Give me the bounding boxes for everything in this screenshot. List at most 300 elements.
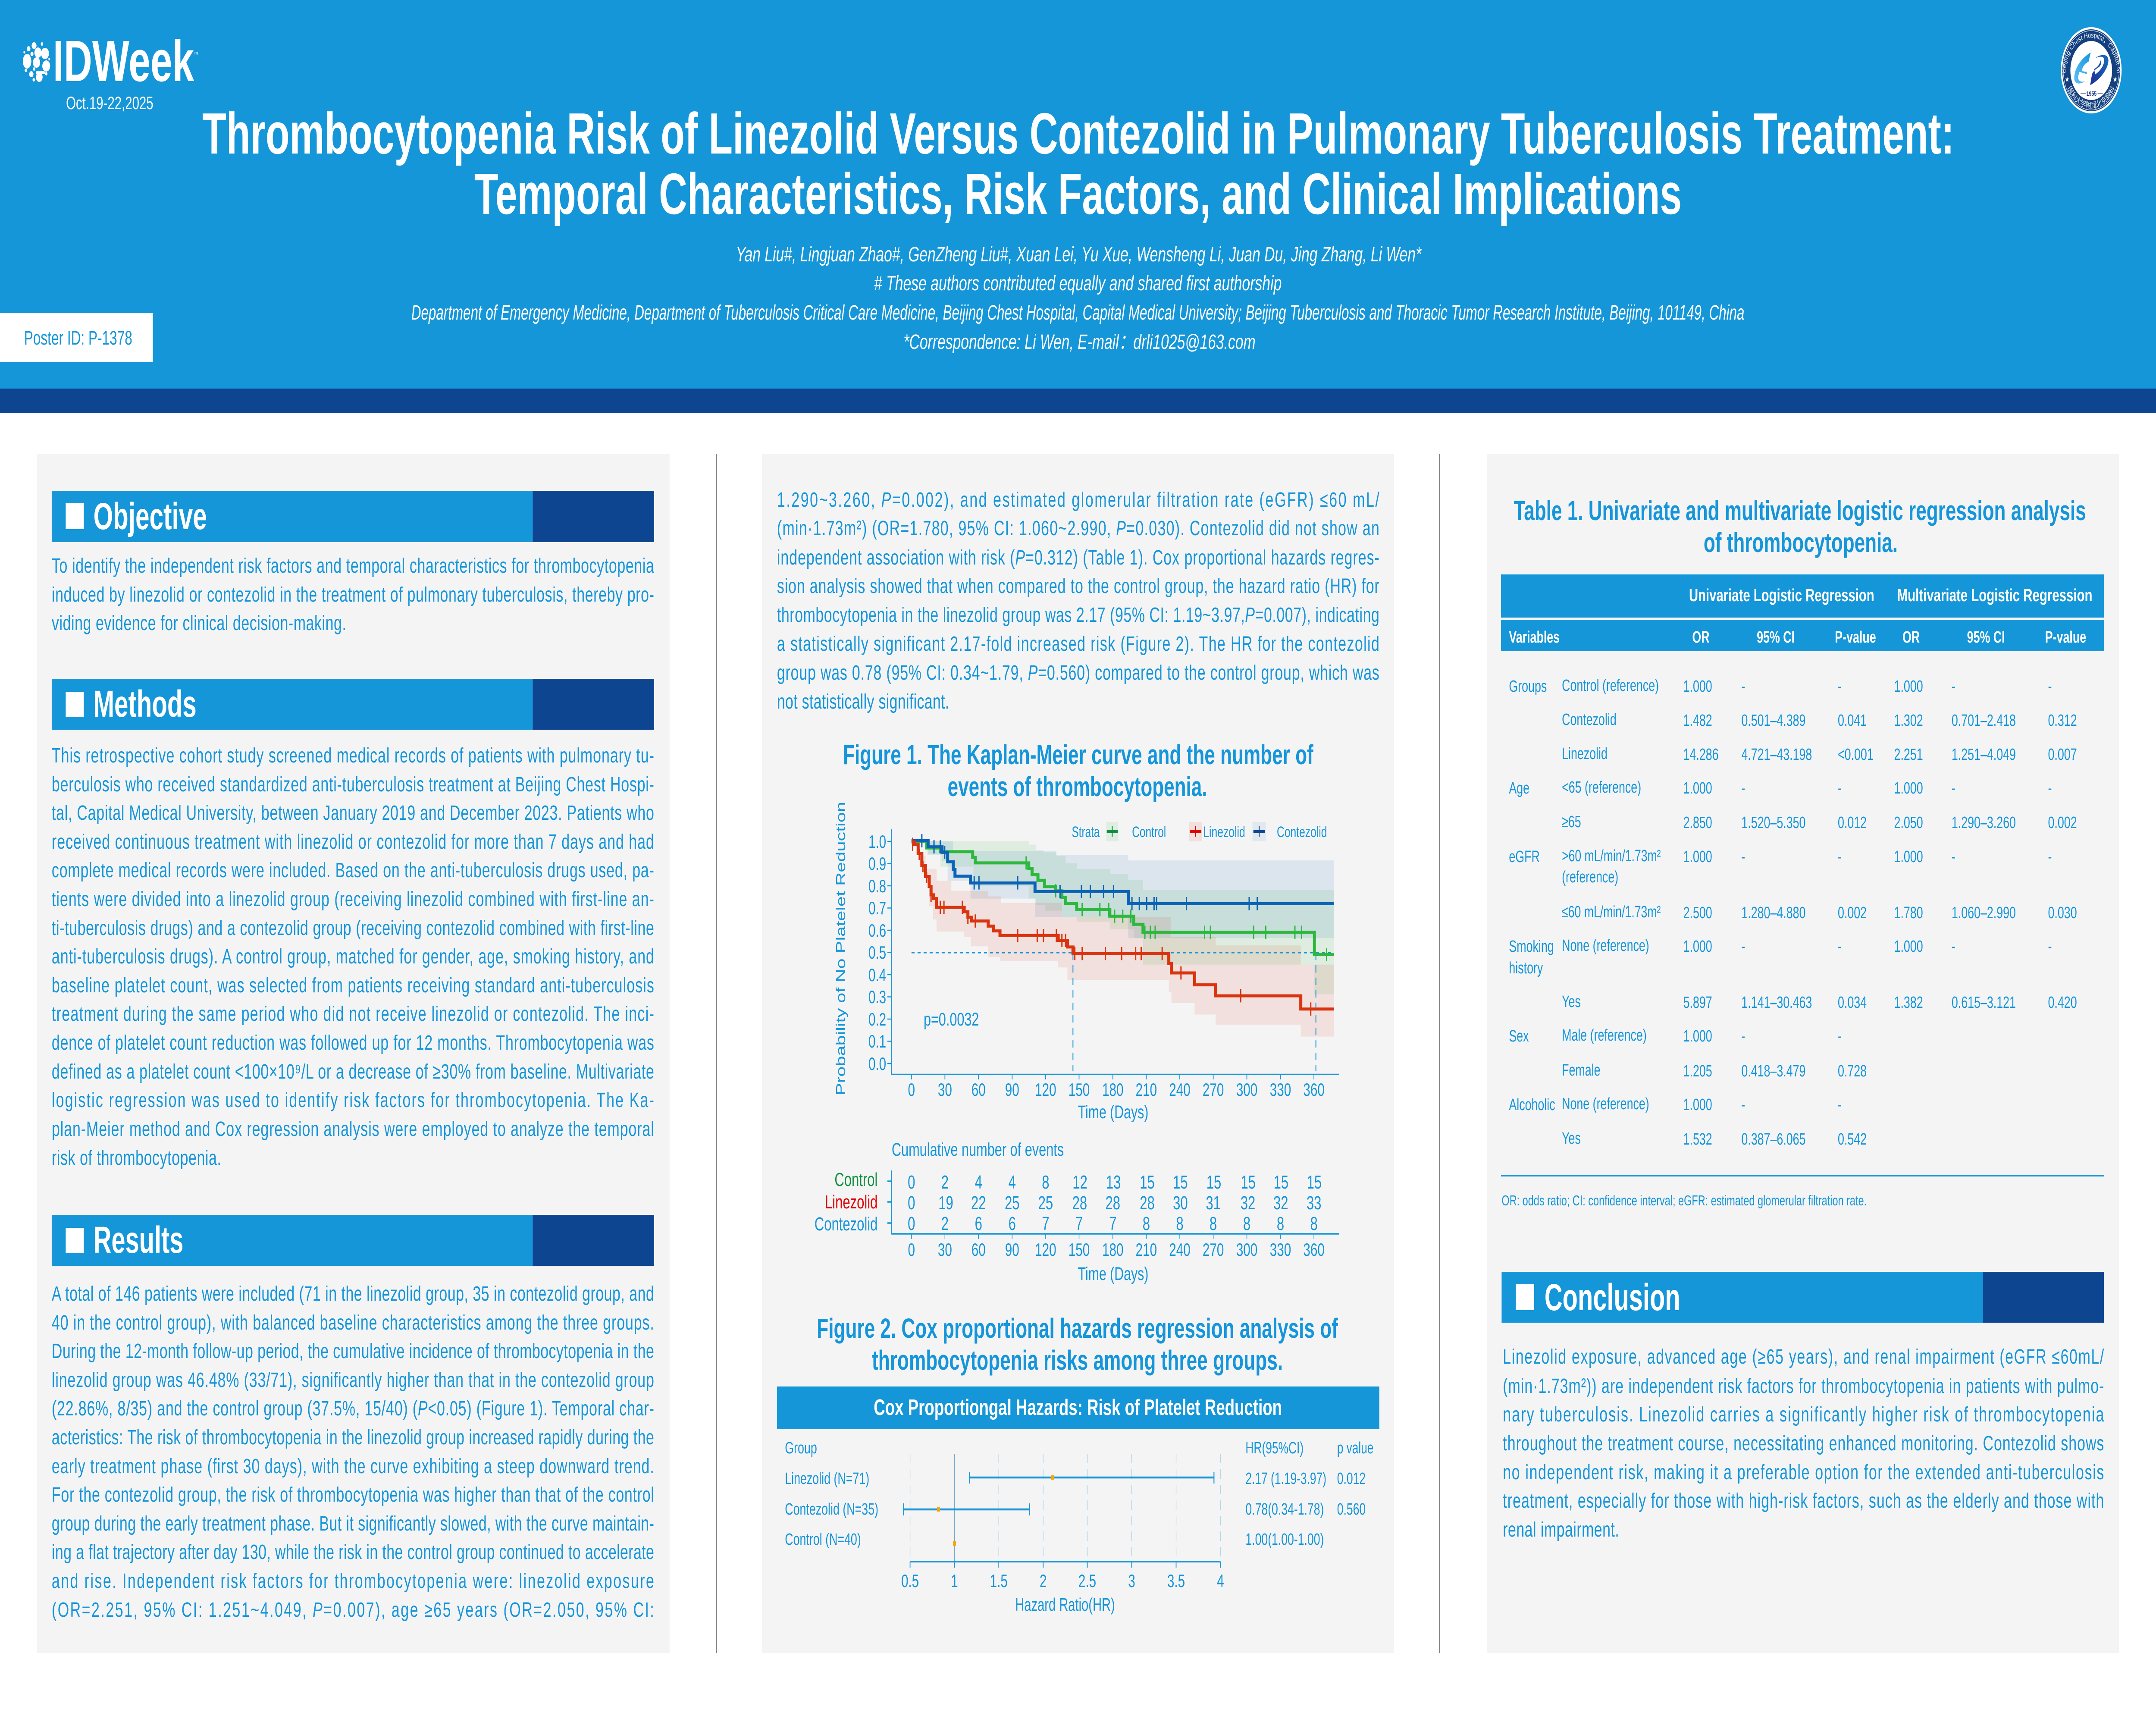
median reference lines [912,953,1334,1071]
row: smoking none: 1.000 [1683,937,1712,955]
forest axis labels: 2 [1040,1571,1047,1591]
header banner [0,0,2156,413]
row: age 65 plus: 0.012 [1838,813,1867,831]
text block: results: group during the early treatment phase. But it significantly slowed, with the curve maintain- [52,1512,654,1535]
forest axis labels: 2.5 [1078,1571,1096,1591]
table: cumulative number of events: 30 [1173,1193,1188,1214]
row: smoking yes: 0.420 [2048,993,2077,1011]
heading: Table 1 [1514,495,2086,558]
row: smoking none: 1.000 [1894,937,1923,955]
table header: OR [1902,627,1920,646]
forest axis labels: 4 [1217,1571,1224,1591]
text block: methods: tal, Capital Medical University, between January 2019 and December 2023. Patients who [52,801,654,824]
text block: results: (22.86%, 8/35) and the control group (37.5%, 15/40) (P<0.05) (Figure 1). Temporal char- [52,1396,654,1420]
table: cumulative number of events: 22 [971,1193,986,1214]
table header: OR [1692,627,1710,646]
row: sex male: Male (reference) [1562,1026,1647,1044]
row: groups control: Groups [1509,677,1547,695]
row: smoking none: - [2048,937,2052,955]
row: smoking none: - [1838,937,1842,955]
row: linezolid [1562,744,2077,763]
row: age 65 plus: ≥65 [1562,812,1581,831]
text block: methods: baseline platelet count, was selected from patients receiving standard anti-tuberculosis [52,973,654,997]
table header: 95% CI [1757,627,1795,646]
row: age reference: - [1838,778,1842,797]
row: alcoholic yes: 1.532 [1683,1129,1712,1148]
table: cumulative number of events: Time (Days) [1078,1263,1148,1284]
forest axis labels: Hazard Ratio(HR) [1015,1594,1115,1615]
text block: results continued: not statistically significant. [777,690,949,713]
text block: conclusion: throughout the treatment course, necessitating enhanced monitoring. Contezolid shows [1503,1431,2104,1455]
text block: methods: ti-tuberculosis drugs) and a contezolid group (receiving contezolid combined with first-line [52,916,654,939]
row: sex female: 0.728 [1838,1061,1867,1080]
table: cumulative number of events: 4 [975,1172,982,1193]
row: eGFR reference [1509,846,2052,886]
chart: Kaplan-Meier curve [833,802,1339,1122]
table: cumulative number of events: 120 [1035,1239,1056,1260]
heading: Figure 1: Figure 1. The Kaplan-Meier curve and the number of [843,739,1313,770]
row: Linezolid: 2.17 (1.19-3.97) [1245,1469,1326,1487]
authors and affiliations: Department of Emergency Medicine, Department of Tuberculosis Critical Care Medicine, Beijing Chest Hospital, Capital Medical University; Beijing Tuberculosis and Thoracic Tumor Research Institute, Beijing, 101149, China [411,301,1744,324]
text block: results continued: thrombocytopenia in the linezolid group was 2.17 (95% CI: 1.19~3.97,P=0.007), indicating [777,603,1379,626]
table: cumulative number of events: 15 [1140,1172,1155,1193]
table: cumulative number of events: 8 [1176,1214,1184,1234]
forest axis labels: 3.5 [1167,1571,1185,1591]
text block: methods: This retrospective cohort study screened medical records of patients with pulmonary tu- [52,743,654,767]
row: eGFR low: ≤60 mL/min/1.73m² [1562,902,1661,921]
text block: results: ing a flat trajectory after day 130, while the risk in the control group continued to accelerate [52,1540,654,1563]
title: Thrombocytopenia Risk of Linezolid Versus Contezolid in Pulmonary Tuberculosis Treatment: [202,101,1954,166]
table header: P-value [1835,627,1876,646]
table: cumulative number of events: 6 [1009,1214,1016,1234]
y axis tick labels: 0.1 [868,1031,886,1051]
row: alcoholic none: None (reference) [1562,1094,1649,1113]
text block: methods [52,743,654,1169]
row: linezolid: Linezolid [1562,744,1608,762]
text block: results continued [777,488,1379,713]
text block: results continued: a statistically significant 2.17-fold increased risk (Figure 2). The HR for the contezolid [777,632,1379,655]
table footnote: OR: odds ratio; CI: confidence interval; eGFR: estimated glomerular filtration rate. [1501,1193,1867,1209]
text block: results continued: sion analysis showed that when compared to the control group, the hazard ratio (HR) for [777,574,1379,597]
heading: Methods [52,679,654,730]
x axis tick labels: 30 [938,1079,952,1100]
poster ID badge: Poster ID: P-1378 [24,328,132,349]
icon: Beijing Chest Hospital seal: ★ [2113,76,2117,83]
heading: Figure 2: thrombocytopenia risks among three groups. [872,1345,1283,1376]
row: alcoholic none: - [1838,1095,1842,1114]
y axis tick labels [868,831,886,1074]
x axis tick labels: 0 [908,1079,915,1100]
row: contezolid: 0.041 [1838,711,1867,729]
table: cumulative number of events [815,1139,1339,1284]
icon: IDWeek molecule logo [23,42,50,82]
row: eGFR reference: - [1741,847,1745,866]
column headers [785,1438,1373,1457]
text block: results: (OR=2.251, 95% CI: 1.251~4.049, P=0.007), age ≥65 years (OR=2.050, 95% CI: [52,1598,654,1621]
row: Contezolid: 0.78(0.34-1.78) [1245,1499,1324,1518]
logo wordmark: IDWeek: IDWeek [53,28,194,94]
row: alcoholic yes: Yes [1562,1129,1581,1147]
text block: methods: dence of platelet count reduction was followed up for 12 months. Thrombocytopenia was [52,1031,654,1054]
table: cumulative number of events: 15 [1241,1172,1256,1193]
text block: methods: received continuous treatment with linezolid or contezolid for more than 7 days and had [52,830,654,853]
row: smoking yes: 0.615–3.121 [1952,993,2016,1011]
table: cumulative number of events: Linezolid [825,1192,877,1213]
table: cumulative number of events: 270 [1203,1239,1224,1260]
text block: methods: risk of thrombocytopenia. [52,1146,221,1169]
y axis tick labels: 0.8 [868,876,886,896]
heading: Figure 2 [817,1313,1338,1376]
table: cumulative number of events: 28 [1072,1193,1087,1214]
text block: results continued: independent association with risk (P=0.312) (Table 1). Cox proportional hazards regres- [777,546,1379,569]
text block: results: and rise. Independent risk factors for thrombocytopenia were: linezolid exposure [52,1569,654,1592]
authors and affiliations [411,242,1744,353]
row: sex male: Sex [1509,1026,1529,1045]
legend: Strata [1072,824,1100,841]
row: alcoholic yes [1562,1129,1867,1148]
table header: Multivariate Logistic Regression [1897,585,2093,605]
text block: methods: defined as a platelet count <100×10⁹/L or a decrease of ≥30% from baseline. Multivariate [52,1060,654,1083]
heading: Table 1: of thrombocytopenia. [1704,527,1898,558]
authors and affiliations: # These authors contributed equally and shared first authorship [874,271,1282,295]
row: eGFR low: 1.780 [1894,903,1923,922]
heading: Table 1: Table 1. Univariate and multivariate logistic regression analysis [1514,495,2086,526]
x axis tick labels: 150 [1069,1079,1090,1100]
y axis tick labels: 1.0 [868,831,886,852]
table: cumulative number of events: 4 [1009,1172,1016,1193]
row: alcoholic none: - [1741,1095,1745,1114]
forest axis labels: 1.5 [990,1571,1008,1591]
column headers: p value [1337,1438,1373,1457]
x axis tick labels: 360 [1303,1079,1325,1100]
row: eGFR reference: eGFR [1509,847,1540,866]
row: sex female: Female [1562,1060,1600,1079]
row: linezolid: 0.007 [2048,745,2077,763]
confidence bands [912,841,1334,1036]
table: cumulative number of events: 60 [971,1239,986,1260]
row: smoking none: - [1952,937,1955,955]
legend: Contezolid [1277,824,1327,841]
table: cumulative number of events: Cumulative number of events [892,1139,1064,1160]
row: age reference: - [2048,778,2052,797]
row: groups control [1509,676,2052,695]
table: cumulative number of events: 7 [1042,1214,1049,1234]
table: cumulative number of events: 25 [1005,1193,1020,1214]
text block: methods: plan-Meier method and Cox regression analysis were employed to analyze the temporal [52,1117,654,1140]
y axis tick labels: 0.6 [868,920,886,941]
panel: middle column [762,454,1394,1653]
x axis tick labels: 300 [1236,1079,1257,1100]
row: contezolid: 0.312 [2048,711,2077,729]
table: cumulative number of events: 90 [1005,1239,1019,1260]
table: cumulative number of events: 0 [908,1172,915,1193]
table: cumulative number of events: 32 [1273,1193,1288,1214]
column headers: HR(95%CI) [1245,1438,1304,1457]
row: eGFR low [1562,902,2077,922]
table header: Variables [1509,627,1560,646]
table: cumulative number of events: 180 [1102,1239,1123,1260]
row: groups control: - [2048,677,2052,695]
table: cumulative number of events: 19 [938,1193,953,1214]
table: cumulative number of events: 0 [908,1214,915,1234]
row: eGFR low: 1.280–4.880 [1741,903,1805,922]
title [202,101,1954,226]
heading: Figure 1: events of thrombocytopenia. [948,771,1207,802]
row: Contezolid: 0.560 [1337,1499,1366,1518]
x axis tick labels: 270 [1203,1079,1224,1100]
row: groups control: - [1741,677,1745,695]
row: groups control: Control (reference) [1562,676,1659,694]
row: smoking none: Smoking [1509,937,1554,955]
table: cumulative number of events: 330 [1270,1239,1291,1260]
row: smoking yes: Yes [1562,992,1581,1010]
row: linezolid: <0.001 [1838,745,1874,763]
text block: methods: logistic regression was used to identify risk factors for thrombocytopenia. The Ka- [52,1088,654,1111]
row: age reference: - [1741,778,1745,797]
text block: results: acteristics: The risk of thrombocytopenia in the linezolid group increased rapidly during the [52,1425,654,1449]
table: cumulative number of events: 7 [1109,1214,1116,1234]
forest axis [910,1561,1221,1562]
y axis tick labels: 0.2 [868,1009,886,1029]
row: age 65 plus: 2.050 [1894,813,1923,831]
row: contezolid: 1.302 [1894,711,1923,729]
heading: Conclusion [1501,1272,2104,1323]
y axis tick labels: 0.7 [868,898,886,918]
curves [912,834,1334,1016]
table: cumulative number of events: 150 [1069,1239,1090,1260]
text block: objective [52,554,655,634]
row: linezolid: 14.286 [1683,745,1719,763]
y axis tick labels: 0.9 [868,853,886,874]
x axis tick labels: 120 [1035,1079,1056,1100]
authors and affiliations: Yan Liu#, Lingjuan Zhao#, GenZheng Liu#, Xuan Lei, Yu Xue, Wensheng Li, Juan Du, Jing Zhang, Li Wen* [736,242,1422,266]
table: cumulative number of events: 15 [1307,1172,1322,1193]
y axis tick labels: 0.4 [868,965,886,985]
heading: Conclusion: Conclusion [1545,1276,1680,1318]
table: cumulative number of events: 30 [938,1239,952,1260]
heading: Objective [52,491,654,542]
table: cumulative number of events: 360 [1303,1239,1325,1260]
text block: methods: complete medical records were included. Based on the anti-tuberculosis drugs used, pa- [52,858,654,881]
row: sex male: - [1838,1026,1842,1045]
heading: Methods: Methods [94,683,197,725]
row: groups control: - [1952,677,1955,695]
row: Linezolid: Linezolid (N=71) [785,1469,869,1487]
row: eGFR low: 1.060–2.990 [1952,903,2016,922]
row: smoking none [1509,936,2052,977]
text block: conclusion: (min·1.73m²)) are independent risk factors for thrombocytopenia in patients with pulmo- [1503,1374,2104,1397]
text block: methods: treatment during the same period who did not receive linezolid or contezolid. The inci- [52,1002,654,1025]
row: alcoholic none: Alcoholic [1509,1095,1555,1114]
text block: conclusion: treatment, especially for those with high-risk factors, such as the elderly and those with [1503,1489,2104,1512]
row: sex female: 1.205 [1683,1061,1712,1080]
row: eGFR reference: >60 mL/min/1.73m² [1562,846,1661,865]
text block: objective: viding evidence for clinical decision-making. [52,611,346,634]
conference date: Oct.19-22,2025 [66,93,154,113]
table: cumulative number of events: 31 [1206,1193,1221,1214]
text block: results: During the 12-month follow-up period, the cumulative incidence of thrombocytopenia in the [52,1339,654,1362]
text block: conclusion: no independent risk, making it a preferable option for the extended anti-tuberculosis [1503,1460,2104,1484]
text block: conclusion [1503,1345,2104,1541]
y axis title: Probability of No Platelet Reduction [833,802,848,1095]
row: sex male: 1.000 [1683,1026,1712,1045]
forest axis labels: 0.5 [901,1571,919,1591]
table: cumulative number of events: 300 [1236,1239,1257,1260]
heading: Figure 2: Figure 2. Cox proportional hazards regression analysis of [817,1313,1338,1344]
table header [1501,574,2104,651]
row: sex female: 0.418–3.479 [1741,1061,1805,1080]
legend: Linezolid [1203,824,1245,841]
heading: Objective: Objective [94,495,207,537]
table: cumulative number of events: 13 [1106,1172,1121,1193]
poster ID badge [0,313,153,362]
row: eGFR reference: (reference) [1562,867,1618,886]
table: cumulative number of events: 8 [1042,1172,1049,1193]
table: cumulative number of events: 7 [1075,1214,1083,1234]
text block: results: 40 in the control group), with balanced baseline characteristics among the three groups. [52,1311,654,1334]
row: eGFR reference: 1.000 [1894,847,1923,866]
text block: conclusion: Linezolid exposure, advanced age (≥65 years), and renal impairment (eGFR ≤60mL/ [1503,1345,2104,1368]
x axis tick labels: 60 [971,1079,986,1100]
y axis tick labels: 0.0 [868,1054,886,1074]
row: alcoholic yes: 0.387–6.065 [1741,1129,1805,1148]
text block: results continued: 1.290~3.260, P=0.002), and estimated glomerular filtration rate (eGFR) ≤60 mL/ [777,488,1379,511]
text block: results: linezolid group was 46.48% (33/71), significantly higher than that in the contezolid group [52,1368,654,1391]
row: age reference: 1.000 [1683,778,1712,797]
table header: P-value [2045,627,2086,646]
row: eGFR reference: - [2048,847,2052,866]
x axis tick labels: 240 [1169,1079,1191,1100]
text block: methods: anti-tuberculosis drugs). A control group, matched for gender, age, smoking history, and [52,944,654,968]
row: linezolid: 4.721–43.198 [1741,745,1812,763]
table: cumulative number of events: 8 [1243,1214,1250,1234]
row: Control: 1.00(1.00-1.00) [1245,1530,1324,1548]
row: groups control: 1.000 [1894,677,1923,695]
x axis tick labels: 90 [1005,1079,1019,1100]
table: cumulative number of events: 33 [1307,1193,1321,1214]
table: cumulative number of events: 32 [1241,1193,1255,1214]
column headers: Group [785,1438,817,1457]
heading: Results: Results [94,1219,183,1261]
table header: Univariate Logistic Regression [1689,585,1874,605]
axes [887,829,1339,1079]
table: cumulative number of events: 8 [1210,1214,1217,1234]
x axis tick labels: 180 [1102,1079,1123,1100]
row: smoking yes [1562,992,2077,1011]
panel: right column [1487,454,2119,1653]
table: cumulative number of events: 2 [941,1172,949,1193]
table: cumulative number of events: 12 [1072,1172,1087,1193]
table: cumulative number of events: Control [834,1170,877,1190]
text block: results: A total of 146 patients were included (71 in the linezolid group, 35 in contezolid group, and [52,1282,654,1305]
table: cumulative number of events: 28 [1140,1193,1155,1214]
row: age 65 plus: 2.850 [1683,813,1712,831]
table header: 95% CI [1967,627,2005,646]
forest axis labels [901,1571,1224,1615]
row: age 65 plus: 1.290–3.260 [1952,813,2016,831]
row: eGFR low: 0.002 [1838,903,1867,922]
table: cumulative number of events: 28 [1106,1193,1120,1214]
table: cumulative number of events: Contezolid [815,1214,877,1235]
x axis tick labels: 330 [1270,1079,1291,1100]
row: smoking yes: 0.034 [1838,993,1867,1011]
row: sex male: - [1741,1026,1745,1045]
row: linezolid: 2.251 [1894,745,1923,763]
p value annotation: p=0.0032 [924,1009,979,1029]
x axis tick labels [908,1079,1325,1100]
text block: methods: tients were divided into a linezolid group (receiving linezolid combined with first-line an- [52,887,654,910]
row: sex male [1509,1026,1842,1045]
row: contezolid [1562,710,2077,729]
row: smoking none: None (reference) [1562,936,1649,954]
row: smoking yes: 1.141–30.463 [1741,993,1812,1011]
x axis title: Time (Days) [1078,1101,1148,1122]
text block: conclusion: renal impairment. [1503,1518,1619,1541]
row: contezolid: 1.482 [1683,711,1712,729]
row: linezolid: 1.251–4.049 [1952,745,2016,763]
chart title bar [777,1386,1379,1429]
table: cumulative number of events: 0 [908,1193,915,1214]
row: smoking none: history [1509,958,1543,977]
table: cumulative number of events: 8 [1143,1214,1150,1234]
forest axis labels: 3 [1128,1571,1135,1591]
row: age reference: <65 (reference) [1562,778,1641,796]
row: groups control: - [1838,677,1842,695]
table: cumulative number of events: 2 [941,1214,949,1234]
text block: objective: induced by linezolid or contezolid in the treatment of pulmonary tuberculosis, thereby pro- [52,583,654,606]
table: cumulative number of events: 15 [1274,1172,1288,1193]
row: age reference [1509,778,2052,797]
row: Control: Control (N=40) [785,1530,861,1548]
table: cumulative number of events: 25 [1038,1193,1053,1214]
x axis tick labels: 210 [1136,1079,1157,1100]
table: cumulative number of events: 15 [1173,1172,1188,1193]
chart title bar: Cox Proportiongal Hazards: Risk of Platelet Reduction [874,1395,1282,1420]
y axis tick labels: 0.5 [868,942,886,963]
row: eGFR low: 2.500 [1683,903,1712,922]
icon: Beijing Chest Hospital seal: 1955 [2087,90,2096,97]
row: age 65 plus: 0.002 [2048,813,2077,831]
row: eGFR low: 0.030 [2048,903,2077,922]
row: eGFR reference: 1.000 [1683,847,1712,866]
row: Linezolid [785,1469,1366,1487]
table: cumulative number of events: 6 [975,1214,982,1234]
row: Contezolid: Contezolid (N=35) [785,1499,878,1518]
row: smoking yes: 1.382 [1894,993,1923,1011]
text block: methods: berculosis who received standardized anti-tuberculosis treatment at Beijing Chest Hospi- [52,772,654,796]
row: age reference: - [1952,778,1955,797]
row: smoking yes: 5.897 [1683,993,1712,1011]
text block: objective: To identify the independent risk factors and temporal characteristics for thrombocytopenia [52,554,655,577]
authors and affiliations: *Correspondence: Li Wen, E-mail：drli1025@163.com [903,330,1256,353]
text block: results: For the contezolid group, the risk of thrombocytopenia was higher than that of the control [52,1483,654,1506]
row: eGFR reference: - [1952,847,1955,866]
chart: forest plot [777,1386,1379,1615]
row: eGFR reference: - [1838,847,1842,866]
row: alcoholic none [1509,1094,1842,1114]
forest axis labels: 1 [951,1571,958,1591]
heading: Figure 1 [843,739,1313,802]
table: cumulative number of events: 8 [1310,1214,1318,1234]
row: contezolid: Contezolid [1562,710,1617,728]
table: cumulative number of events: 15 [1206,1172,1221,1193]
row: age reference: 1.000 [1894,778,1923,797]
heading: Results [52,1215,654,1266]
row: sex female [1562,1060,1867,1080]
row: contezolid: 0.701–2.418 [1952,711,2016,729]
row: Contezolid [785,1499,1366,1518]
row: Linezolid: 0.012 [1337,1469,1366,1487]
